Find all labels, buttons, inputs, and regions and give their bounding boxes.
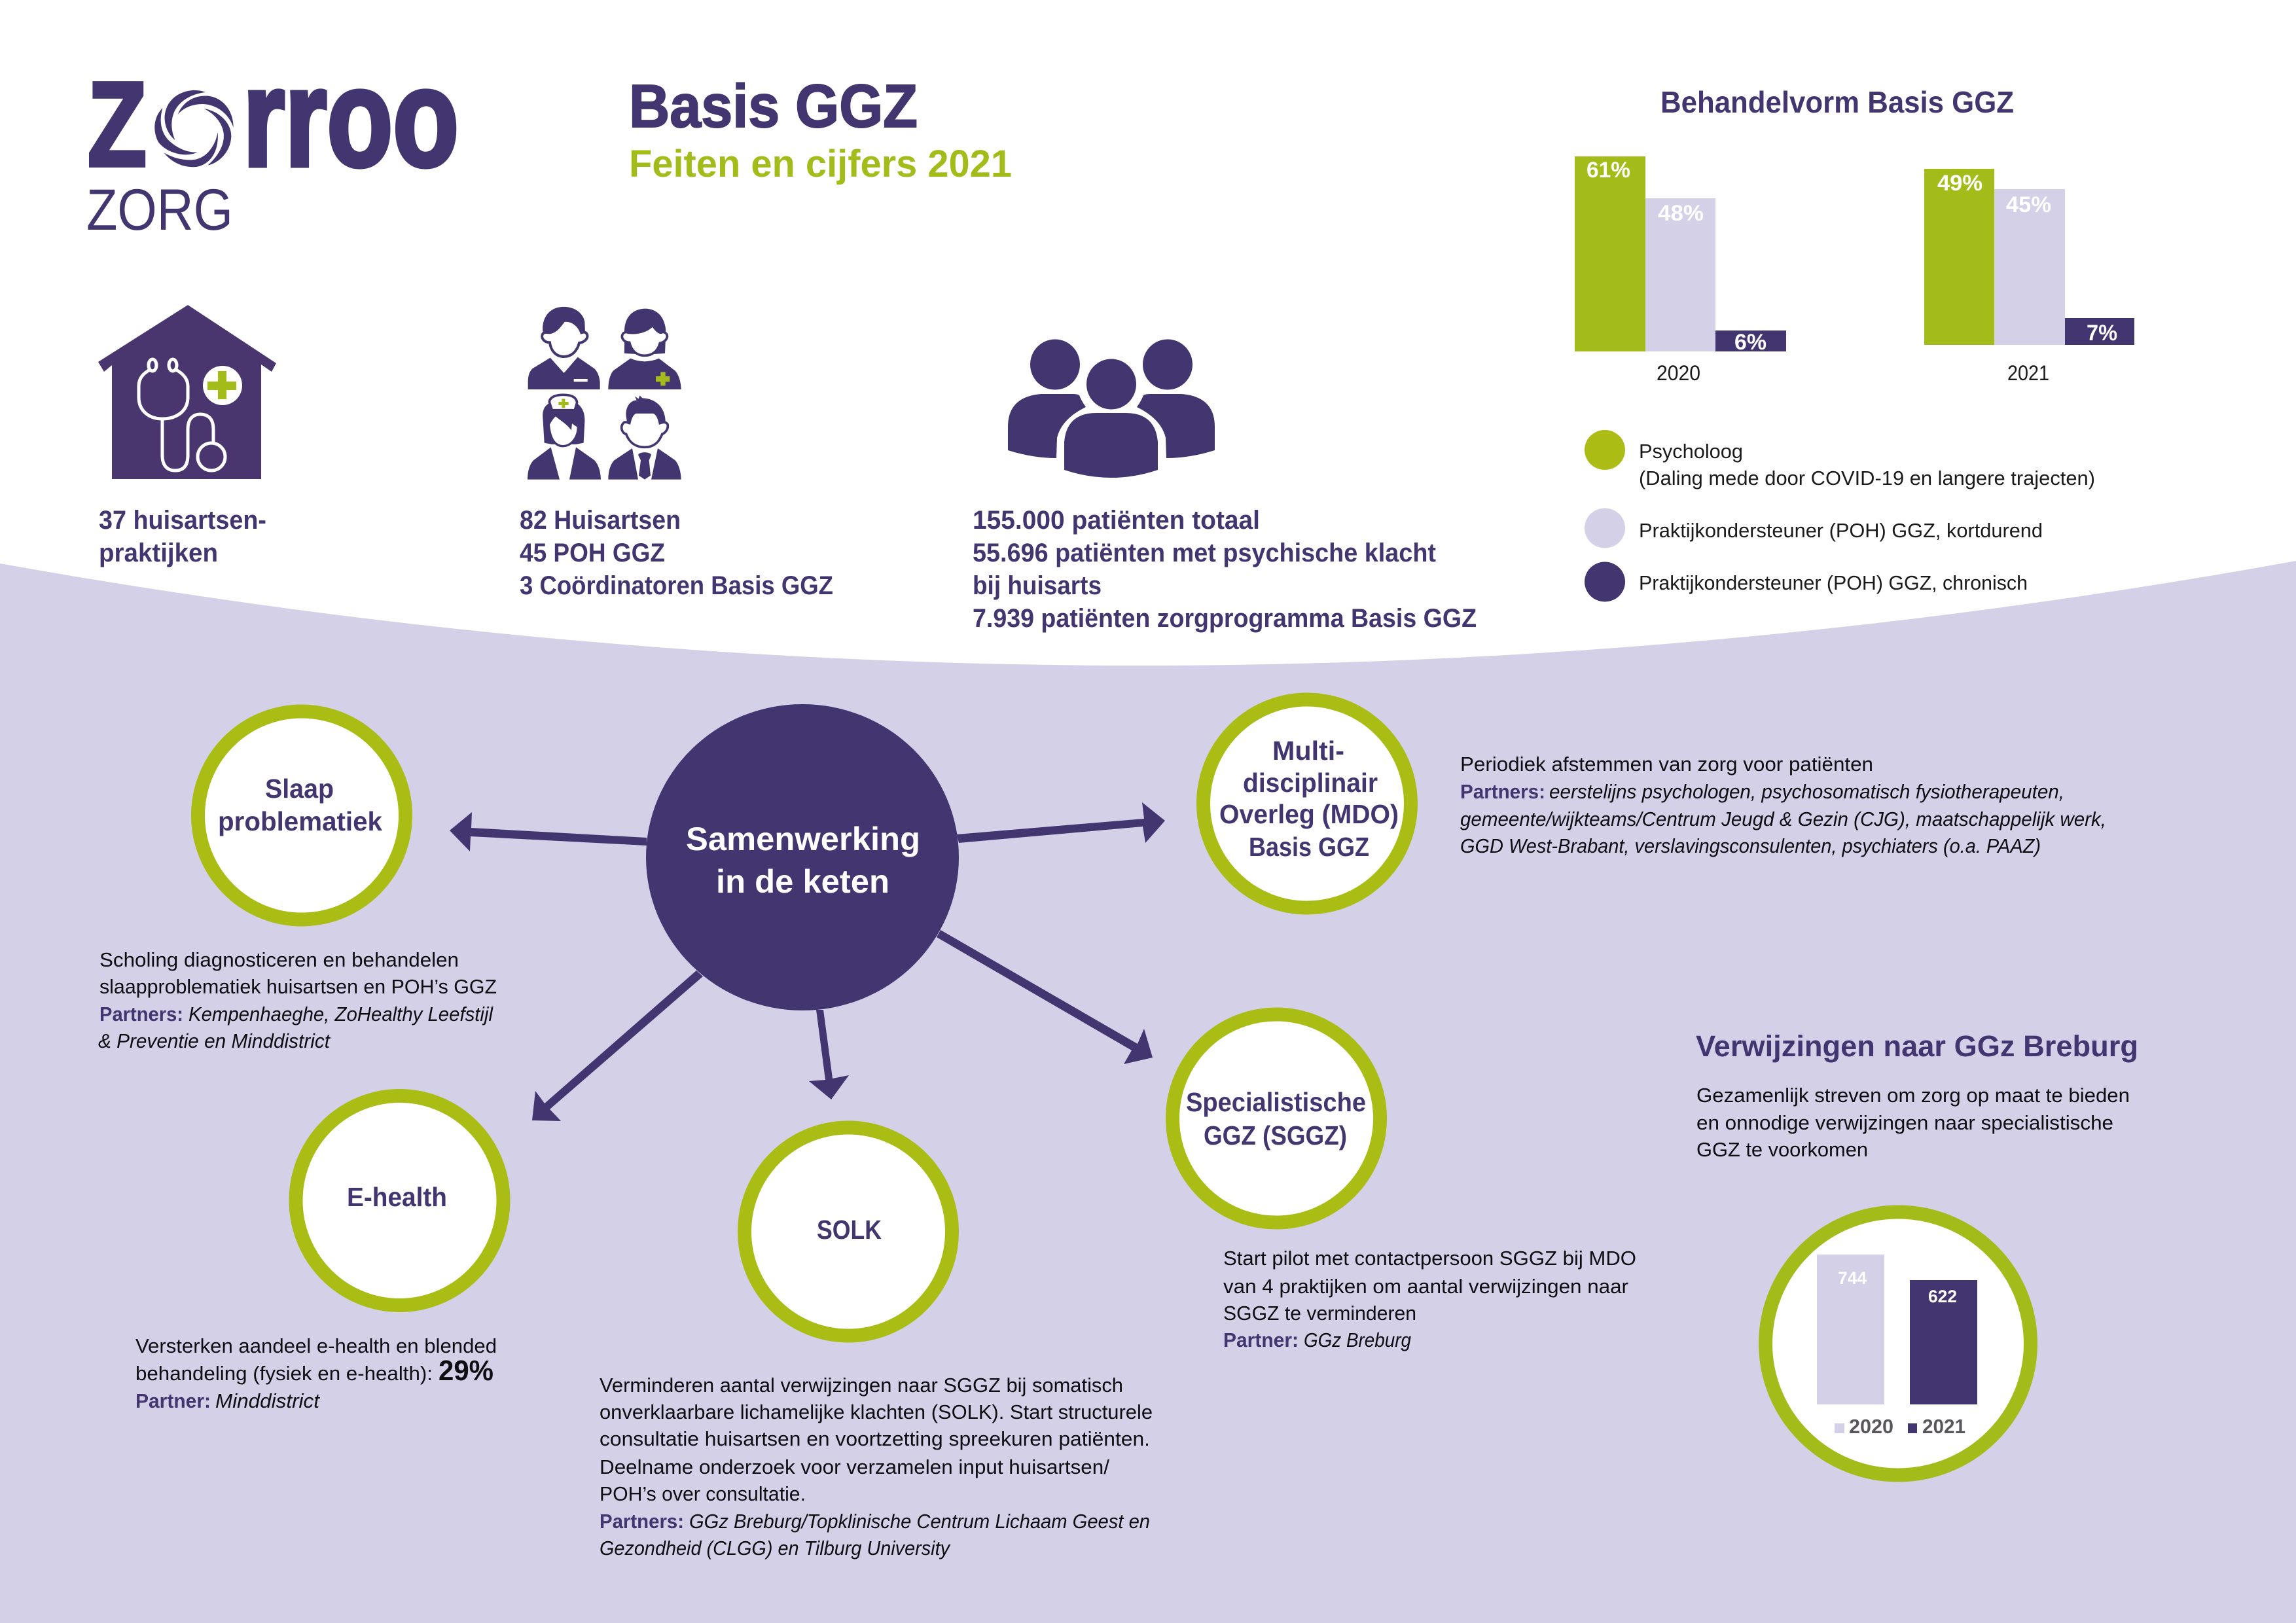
text: SGGZ description: SGGZ te verminderen — [1223, 1302, 1416, 1325]
circle: Specialistische GGZ — [1173, 1014, 1380, 1222]
bar chart: behandelvorm 2020: 6% — [1734, 330, 1767, 355]
circle: Multidisciplinair Overleg: Multi- — [1272, 736, 1344, 766]
central circle: Samenwerking in de keten: Samenwerking — [686, 821, 920, 857]
logo: Zorroo Zorg: ZORG — [86, 177, 233, 242]
text: Slaapproblematiek description: Partners: — [99, 1003, 183, 1026]
subtitle: Feiten en cijfers 2021 — [629, 143, 1012, 185]
text: SGGZ description: Start pilot met contactpersoon SGGZ bij MDO — [1223, 1247, 1636, 1270]
arrow: to SOLK — [809, 1010, 849, 1099]
circle: Multidisciplinair Overleg: Basis GGZ — [1249, 832, 1369, 862]
circle: Multidisciplinair Overleg: disciplinair — [1243, 768, 1378, 798]
figure: woman with green cross — [608, 309, 681, 389]
text: E-health description: 29% — [439, 1355, 493, 1387]
icon: group of patients — [1008, 339, 1215, 478]
logo: Zorroo Zorg: Z — [88, 57, 147, 191]
text: Verwijzingen description: GGZ te voorkomen — [1696, 1138, 1868, 1161]
bar chart: behandelvorm 2020 — [1575, 156, 1786, 385]
central circle: Samenwerking in de keten — [646, 704, 959, 1010]
legend: behandelvorm — [1585, 430, 2095, 602]
figure: man with tie — [608, 395, 681, 480]
arrow: to Slaapproblematiek — [450, 812, 647, 851]
text: Slaapproblematiek description: slaapproblematiek huisartsen en POH’s GGZ — [99, 975, 497, 998]
arrow: to SGGZ — [937, 930, 1153, 1064]
text: MDO description: GGD West-Brabant, verslavingsconsulenten, psychiaters (o.a. PAAZ) — [1460, 834, 2041, 857]
chart: verwijzingen bar chart in circle: 2020 — [1849, 1415, 1893, 1438]
circle: Slaapproblematiek: Slaap — [265, 774, 334, 804]
icon: four care professionals — [528, 307, 681, 480]
bar chart: behandelvorm 2021: 49% — [1937, 171, 1982, 196]
text: SOLK description: consultatie huisartsen en voortzetting spreekuren patiënten. — [600, 1427, 1150, 1450]
text: MDO description: Periodiek afstemmen van zorg voor patiënten — [1460, 753, 1873, 776]
text: staff counts: 3 Coördinatoren Basis GGZ — [520, 571, 833, 600]
text: staff counts: 45 POH GGZ — [520, 539, 665, 567]
arrow: to MDO — [957, 802, 1165, 843]
heading: Behandelvorm Basis GGZ: Behandelvorm Basis GGZ — [1660, 85, 2014, 119]
chart: verwijzingen bar chart in circle: 744 — [1838, 1268, 1867, 1288]
text: Slaapproblematiek description: Scholing diagnosticeren en behandelen — [99, 948, 459, 971]
text: Slaapproblematiek description: Kempenhaeghe, ZoHealthy Leefstijl — [188, 1003, 493, 1026]
text: SGGZ description: GGz Breburg — [1304, 1329, 1411, 1351]
circle: SOLK: SOLK — [817, 1215, 882, 1245]
logo: Zorroo Zorg: rroo — [243, 40, 459, 195]
text: SOLK description: Partners: — [600, 1510, 684, 1533]
chart: verwijzingen bar chart in circle: 2021 — [1922, 1415, 1965, 1438]
bar chart: behandelvorm 2020: 61% — [1587, 158, 1630, 183]
text: huisartsenpraktijken — [99, 506, 266, 567]
text: huisartsenpraktijken: 37 huisartsen- — [99, 506, 266, 535]
text: SOLK description: onverklaarbare lichamelijke klachten (SOLK). Start structurele — [600, 1400, 1153, 1423]
bar chart: behandelvorm 2020: 2020 — [1657, 361, 1700, 385]
circle: E-health — [296, 1096, 503, 1305]
legend: behandelvorm: Psycholoog — [1639, 440, 1743, 463]
bar chart: behandelvorm 2021: 2021 — [2007, 361, 2049, 385]
text: huisartsenpraktijken: praktijken — [99, 539, 218, 567]
lavender curved background — [0, 561, 2296, 1623]
figure: nurse — [528, 395, 601, 480]
text: patient counts: 155.000 patiënten totaal — [973, 506, 1260, 535]
circle: E-health: E-health — [347, 1182, 447, 1212]
text: MDO description — [1460, 753, 2106, 857]
text: SOLK description: Gezondheid (CLGG) en Tilburg University — [600, 1537, 951, 1560]
text: MDO description: gemeente/wijkteams/Centrum Jeugd & Gezin (CJG), maatschappelijk werk, — [1460, 808, 2106, 830]
circle: Multidisciplinair Overleg: Overleg (MDO) — [1219, 799, 1399, 829]
legend: behandelvorm: Praktijkondersteuner (POH) GGZ, kortdurend — [1639, 519, 2043, 542]
text: E-health description: Versterken aandeel e-health en blended — [135, 1334, 497, 1357]
icon: logo swirl — [154, 90, 234, 167]
text: patient counts: 7.939 patiënten zorgprogramma Basis GGZ — [973, 604, 1477, 633]
legend: behandelvorm: (Daling mede door COVID-19 en langere trajecten) — [1639, 467, 2095, 490]
text: staff counts — [520, 506, 833, 600]
text: MDO description: Partners: — [1460, 780, 1545, 803]
circle: Multidisciplinair Overleg — [1203, 700, 1411, 908]
text: SOLK description: Verminderen aantal verwijzingen naar SGGZ bij somatisch — [600, 1374, 1123, 1397]
circle: Slaapproblematiek — [198, 711, 406, 919]
chart: verwijzingen bar chart in circle: 622 — [1928, 1287, 1957, 1306]
bar chart: behandelvorm 2021: 45% — [2006, 192, 2051, 217]
legend: behandelvorm: Praktijkondersteuner (POH) GGZ, chronisch — [1639, 571, 2028, 594]
circle: SOLK — [745, 1128, 952, 1336]
text: SGGZ description: Partner: — [1223, 1329, 1299, 1351]
heading: Verwijzingen naar GGz Breburg: Verwijzingen naar GGz Breburg — [1696, 1029, 2138, 1063]
bar chart: behandelvorm 2021: 7% — [2087, 321, 2117, 346]
text: SOLK description: POH’s over consultatie. — [600, 1482, 806, 1505]
text: E-health description: behandeling (fysiek en e-health): — [135, 1362, 433, 1385]
text: SOLK description — [600, 1374, 1153, 1560]
figure: man with bar — [528, 307, 600, 389]
text: patient counts: 55.696 patiënten met psychische klacht — [973, 539, 1436, 567]
text: SOLK description: Deelname onderzoek voor verzamelen input huisartsen/ — [600, 1455, 1109, 1478]
chart: verwijzingen bar chart in circle — [1766, 1212, 2030, 1475]
text: E-health description: Minddistrict — [215, 1389, 320, 1412]
icon: house with stethoscope — [98, 305, 276, 479]
text: SGGZ description — [1223, 1247, 1636, 1351]
text: patient counts: bij huisarts — [973, 571, 1102, 600]
text: Slaapproblematiek description: & Preventie en Minddistrict — [98, 1029, 331, 1052]
title: Basis GGZ — [629, 72, 918, 140]
text: Verwijzingen description: en onnodige verwijzingen naar specialistische — [1696, 1111, 2113, 1134]
circle: Specialistische GGZ: GGZ (SGGZ) — [1204, 1120, 1347, 1150]
text: SOLK description: GGz Breburg/Topklinische Centrum Lichaam Geest en — [689, 1510, 1150, 1533]
text: E-health description — [135, 1334, 497, 1412]
circle: Specialistische GGZ: Specialistische — [1186, 1087, 1366, 1117]
bar chart: behandelvorm 2020: 48% — [1658, 201, 1704, 226]
text: MDO description: eerstelijns psychologen, psychosomatisch fysiotherapeuten, — [1549, 780, 2064, 803]
text: staff counts: 82 Huisartsen — [520, 506, 681, 535]
arrow: to E-health — [532, 971, 703, 1121]
text: E-health description: Partner: — [135, 1389, 211, 1412]
text: SGGZ description: van 4 praktijken om aantal verwijzingen naar — [1223, 1275, 1628, 1298]
text: Slaapproblematiek description — [98, 948, 497, 1052]
circle: Slaapproblematiek: problematiek — [218, 806, 382, 836]
text: patient counts — [973, 506, 1477, 633]
text: Verwijzingen description: Gezamenlijk streven om zorg op maat te bieden — [1696, 1084, 2130, 1107]
text: Verwijzingen description — [1696, 1084, 2130, 1161]
bar chart: behandelvorm 2021 — [1924, 169, 2134, 385]
logo: Zorroo Zorg — [86, 40, 459, 242]
central circle: Samenwerking in de keten: in de keten — [716, 863, 889, 900]
